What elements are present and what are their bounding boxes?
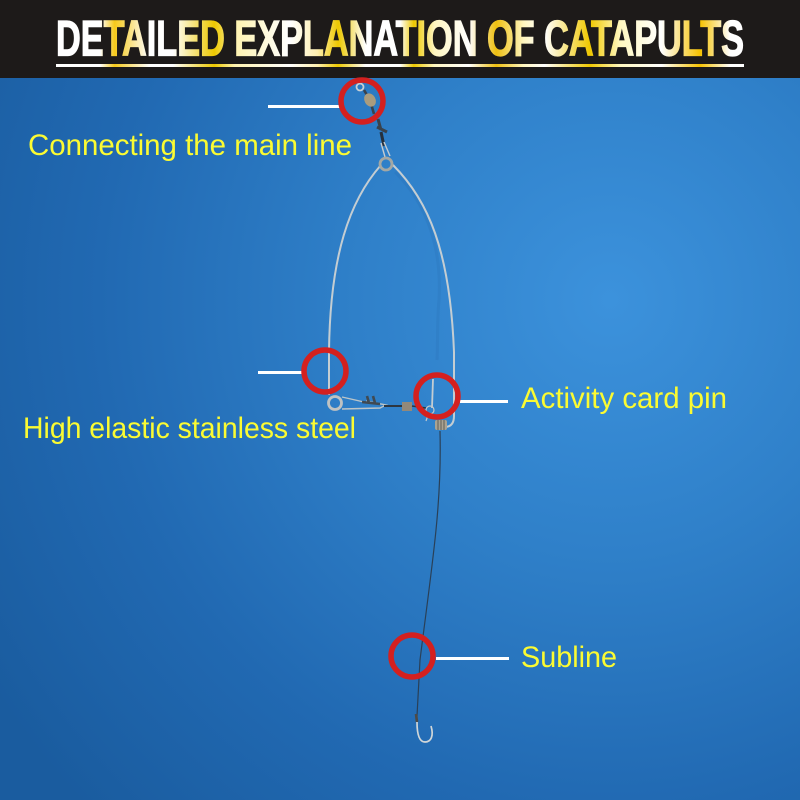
callout: subline bbox=[391, 635, 617, 677]
callout: connecting the main line: Connecting the main line bbox=[28, 129, 352, 162]
callout: high elastic stainless steel: High elastic stainless steel bbox=[23, 412, 356, 445]
subline and hook bbox=[416, 431, 440, 742]
callout: activity card pin: Activity card pin bbox=[521, 382, 727, 415]
snap swivel at top bbox=[356, 84, 390, 157]
callout: connecting the main line bbox=[28, 80, 383, 162]
callout: activity card pin bbox=[416, 375, 727, 417]
activity card pin bbox=[328, 379, 447, 430]
catapult fishing rig bbox=[328, 84, 454, 742]
stainless steel wire frame bbox=[329, 158, 454, 427]
callout: high elastic stainless steel bbox=[23, 350, 356, 445]
title banner bbox=[0, 0, 800, 78]
callout: subline: Subline bbox=[521, 641, 617, 674]
title underline bbox=[56, 64, 744, 67]
